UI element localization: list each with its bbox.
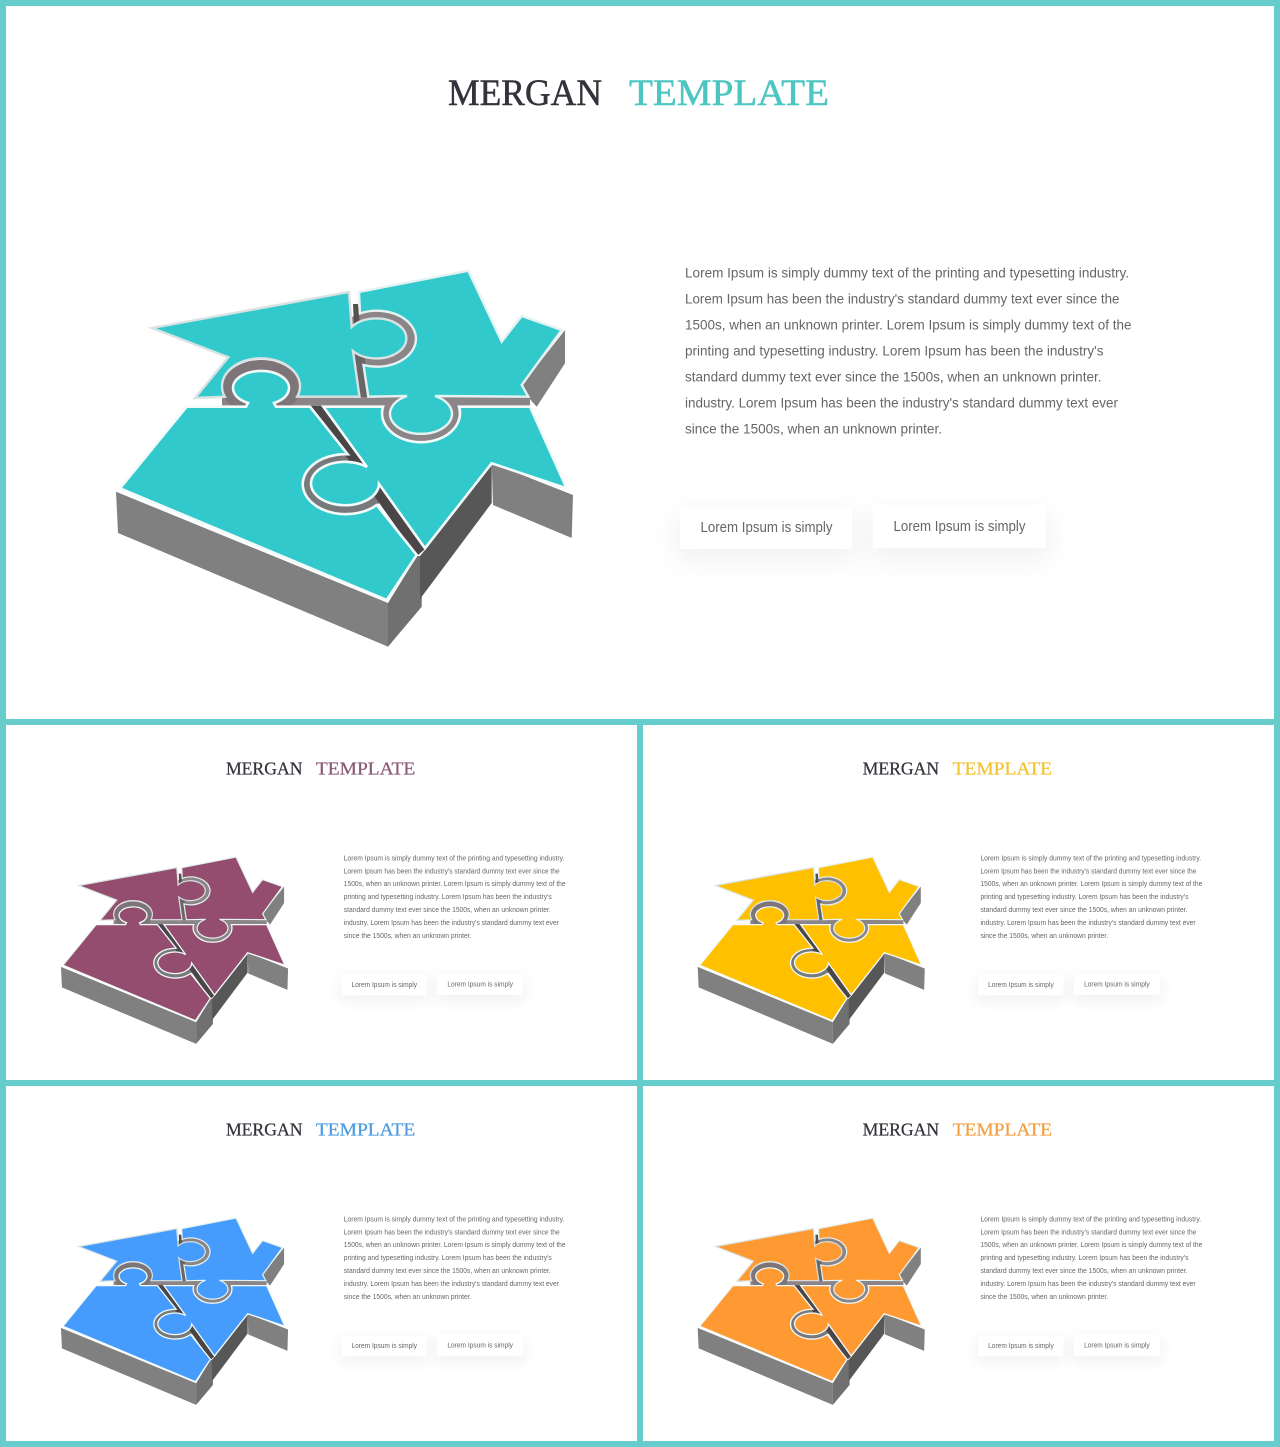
text block: printing and typesetting industry. Lorem Ipsum has been the industry's bbox=[685, 342, 1104, 358]
text block: since the 1500s, when an unknown printer. bbox=[344, 933, 472, 940]
text block: Lorem Ipsum is simply dummy text of the printing and typesetting industry. bbox=[685, 264, 1129, 280]
text block: industry. Lorem Ipsum has been the industry's standard dummy text ever bbox=[344, 920, 560, 927]
text block bbox=[685, 264, 1132, 436]
text block: industry. Lorem Ipsum has been the industry's standard dummy text ever bbox=[344, 1281, 560, 1288]
text block: industry. Lorem Ipsum has been the industry's standard dummy text ever bbox=[980, 920, 1196, 927]
text block: Lorem Ipsum is simply dummy text of the printing and typesetting industry. bbox=[344, 855, 564, 862]
panel: blue slide bbox=[6, 1086, 637, 1441]
text block: Lorem Ipsum is simply dummy text of the printing and typesetting industry. bbox=[980, 855, 1201, 862]
text block: printing and typesetting industry. Lorem Ipsum has been the industry's bbox=[344, 1255, 552, 1262]
title: MERGAN bbox=[863, 759, 939, 779]
text block bbox=[980, 855, 1202, 940]
button left: Lorem Ipsum is simply bbox=[351, 980, 417, 989]
panel: orange slide bbox=[643, 1086, 1274, 1441]
title: TEMPLATE bbox=[629, 73, 829, 114]
text block: 1500s, when an unknown printer. Lorem Ipsum is simply dummy text of the bbox=[344, 881, 566, 888]
button right bbox=[435, 973, 525, 1002]
text block: Lorem Ipsum is simply dummy text of the printing and typesetting industry. bbox=[980, 1216, 1201, 1223]
text block: since the 1500s, when an unknown printer. bbox=[980, 1294, 1108, 1301]
text block: Lorem Ipsum has been the industry's standard dummy text ever since the bbox=[685, 290, 1120, 306]
text block: industry. Lorem Ipsum has been the industry's standard dummy text ever bbox=[685, 394, 1118, 410]
button left: Lorem Ipsum is simply bbox=[700, 520, 833, 536]
title: MERGAN bbox=[226, 759, 302, 779]
button right: Lorem Ipsum is simply bbox=[447, 979, 513, 988]
text block: 1500s, when an unknown printer. Lorem Ipsum is simply dummy text of the bbox=[685, 316, 1132, 332]
text block bbox=[980, 1216, 1202, 1301]
button left: Lorem Ipsum is simply bbox=[351, 1341, 417, 1350]
text block: since the 1500s, when an unknown printer. bbox=[344, 1294, 472, 1301]
title: TEMPLATE bbox=[316, 759, 415, 779]
title: TEMPLATE bbox=[953, 759, 1052, 779]
icon: puzzle house bbox=[698, 1218, 925, 1405]
button left bbox=[676, 507, 856, 562]
panel: main teal slide bbox=[6, 6, 1274, 719]
text block: Lorem Ipsum has been the industry's standard dummy text ever since the bbox=[344, 1229, 560, 1236]
button left bbox=[339, 974, 429, 1002]
title: TEMPLATE bbox=[953, 1120, 1052, 1140]
text block: standard dummy text ever since the 1500s, when an unknown printer. bbox=[980, 1268, 1188, 1275]
icon: puzzle house bbox=[61, 1218, 288, 1405]
button left: Lorem Ipsum is simply bbox=[988, 980, 1054, 989]
text block: standard dummy text ever since the 1500s, when an unknown printer. bbox=[685, 368, 1102, 384]
button right bbox=[869, 505, 1050, 562]
title: TEMPLATE bbox=[316, 1120, 415, 1140]
text block: 1500s, when an unknown printer. Lorem Ipsum is simply dummy text of the bbox=[980, 1242, 1202, 1249]
text block: industry. Lorem Ipsum has been the industry's standard dummy text ever bbox=[980, 1281, 1196, 1288]
icon: puzzle house bbox=[61, 857, 288, 1044]
text block: printing and typesetting industry. Lorem Ipsum has been the industry's bbox=[980, 1255, 1189, 1262]
button left bbox=[976, 1335, 1065, 1363]
text block: standard dummy text ever since the 1500s, when an unknown printer. bbox=[344, 907, 551, 914]
text block: standard dummy text ever since the 1500s, when an unknown printer. bbox=[980, 907, 1188, 914]
title bbox=[226, 759, 415, 779]
text block: Lorem Ipsum has been the industry's standard dummy text ever since the bbox=[980, 868, 1197, 875]
text block bbox=[344, 855, 566, 940]
icon: puzzle house bbox=[116, 271, 573, 647]
button right bbox=[1072, 973, 1162, 1002]
text block: Lorem Ipsum is simply dummy text of the printing and typesetting industry. bbox=[344, 1216, 564, 1223]
button right: Lorem Ipsum is simply bbox=[1084, 979, 1150, 988]
text block bbox=[344, 1216, 566, 1301]
button left: Lorem Ipsum is simply bbox=[988, 1341, 1054, 1350]
button left bbox=[976, 974, 1065, 1002]
title: MERGAN bbox=[226, 1120, 302, 1140]
text block: Lorem Ipsum has been the industry's standard dummy text ever since the bbox=[980, 1229, 1197, 1236]
text block: 1500s, when an unknown printer. Lorem Ipsum is simply dummy text of the bbox=[344, 1242, 566, 1249]
button right: Lorem Ipsum is simply bbox=[1084, 1340, 1150, 1349]
text block: printing and typesetting industry. Lorem Ipsum has been the industry's bbox=[344, 894, 552, 901]
text block: Lorem Ipsum has been the industry's standard dummy text ever since the bbox=[344, 868, 560, 875]
text block: printing and typesetting industry. Lorem Ipsum has been the industry's bbox=[980, 894, 1189, 901]
button right: Lorem Ipsum is simply bbox=[447, 1340, 513, 1349]
button right bbox=[1072, 1334, 1162, 1363]
panel: yellow slide bbox=[643, 725, 1274, 1080]
title bbox=[226, 1120, 415, 1140]
panel: plum slide bbox=[6, 725, 637, 1080]
icon: puzzle house bbox=[698, 857, 925, 1044]
title: MERGAN bbox=[448, 73, 602, 114]
button right bbox=[435, 1334, 525, 1363]
title: MERGAN bbox=[863, 1120, 939, 1140]
title bbox=[448, 73, 829, 114]
text block: 1500s, when an unknown printer. Lorem Ipsum is simply dummy text of the bbox=[980, 881, 1202, 888]
button right: Lorem Ipsum is simply bbox=[894, 519, 1026, 535]
title bbox=[863, 759, 1052, 779]
text block: since the 1500s, when an unknown printer. bbox=[980, 933, 1108, 940]
title bbox=[863, 1120, 1052, 1140]
text block: standard dummy text ever since the 1500s, when an unknown printer. bbox=[344, 1268, 551, 1275]
button left bbox=[339, 1335, 429, 1363]
text block: since the 1500s, when an unknown printer. bbox=[685, 420, 942, 436]
